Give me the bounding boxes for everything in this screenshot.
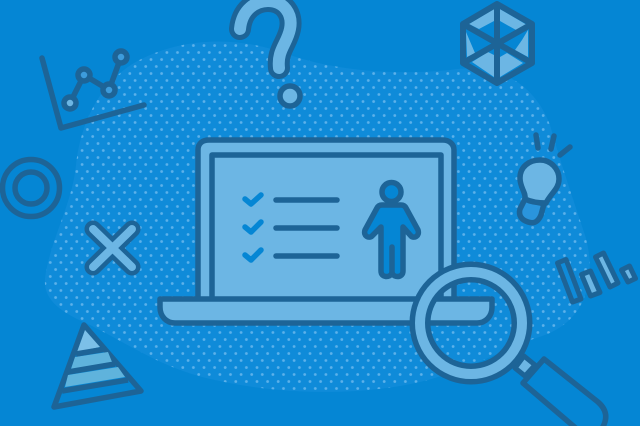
list lines xyxy=(276,200,337,256)
icon: person xyxy=(365,182,418,277)
dot pattern xyxy=(45,41,590,392)
dotted blob xyxy=(45,41,590,392)
icon: hexagon xyxy=(463,4,532,83)
icon: pyramid xyxy=(54,325,141,407)
checklist xyxy=(245,195,337,260)
laptop lid xyxy=(198,140,454,301)
icon: bar chart xyxy=(558,253,636,302)
icon: magnifying glass xyxy=(420,272,606,426)
laptop base xyxy=(160,299,492,323)
icon: target rings xyxy=(2,160,60,216)
icon: light bulb xyxy=(519,135,570,223)
handle xyxy=(523,359,606,426)
icon: question mark xyxy=(240,1,300,106)
check marks xyxy=(245,195,261,260)
handle neck xyxy=(515,356,535,376)
lens ring xyxy=(420,272,522,374)
laptop screen xyxy=(212,155,441,299)
icon: X mark xyxy=(93,229,132,267)
laptop xyxy=(160,140,492,323)
icon: line chart xyxy=(42,51,144,128)
